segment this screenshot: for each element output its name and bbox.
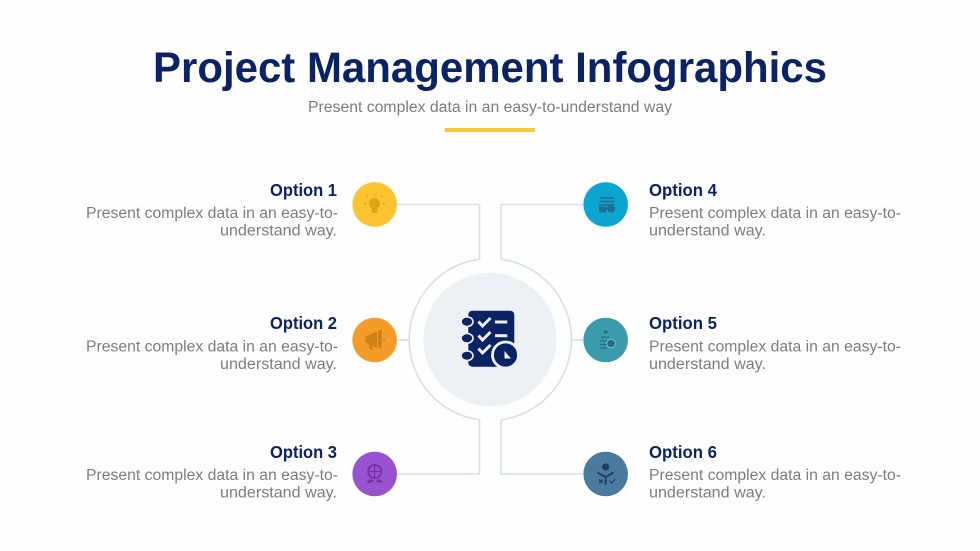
option 4 circle with data sheet icon: [583, 182, 628, 227]
option 1 text: [86, 180, 338, 240]
title: Project Management Infographics: [153, 44, 827, 92]
option 5 text: understand way.: [649, 356, 766, 373]
option 4 text: [649, 180, 901, 240]
option 4 text: Present complex data in an easy-to-: [649, 205, 901, 222]
option 6 text: Option 6: [649, 442, 717, 462]
option 6 text: Present complex data in an easy-to-: [649, 467, 901, 484]
subtitle: Present complex data in an easy-to-understand way: [308, 99, 672, 116]
option 4 text: Option 4: [649, 180, 717, 200]
option 3 circle with award globe icon: [352, 452, 397, 496]
option 6 text: understand way.: [649, 484, 766, 502]
connector lines: [397, 204, 583, 474]
central ring: [409, 259, 571, 420]
option 2 text: [86, 313, 338, 373]
option 1 text: understand way.: [220, 222, 337, 240]
option 3 text: Present complex data in an easy-to-: [86, 467, 338, 484]
option 1 text: Option 1: [270, 180, 337, 200]
central disc: [423, 273, 557, 406]
option 2 text: Present complex data in an easy-to-: [86, 338, 338, 356]
option 4 text: understand way.: [649, 222, 766, 240]
option 1 text: Present complex data in an easy-to-: [86, 205, 338, 222]
option 3 text: [86, 442, 338, 502]
option 2 text: Option 2: [270, 313, 337, 333]
option 5 text: [649, 313, 901, 373]
option 2 circle with megaphone icon: [352, 318, 397, 362]
option 5 text: Option 5: [649, 313, 717, 333]
icon: project checklist with clock: [461, 311, 518, 368]
option 3 text: Option 3: [270, 442, 337, 462]
option 6 text: [649, 442, 901, 502]
option 5 circle with budget list icon: [583, 318, 628, 362]
option 2 text: understand way.: [220, 356, 337, 373]
option 5 text: Present complex data in an easy-to-: [649, 338, 901, 356]
option 6 circle with decision person icon: [583, 452, 628, 496]
option 1 circle with lightbulb icon: [352, 182, 397, 227]
option 3 text: understand way.: [220, 484, 337, 502]
accent underline: [445, 128, 535, 132]
